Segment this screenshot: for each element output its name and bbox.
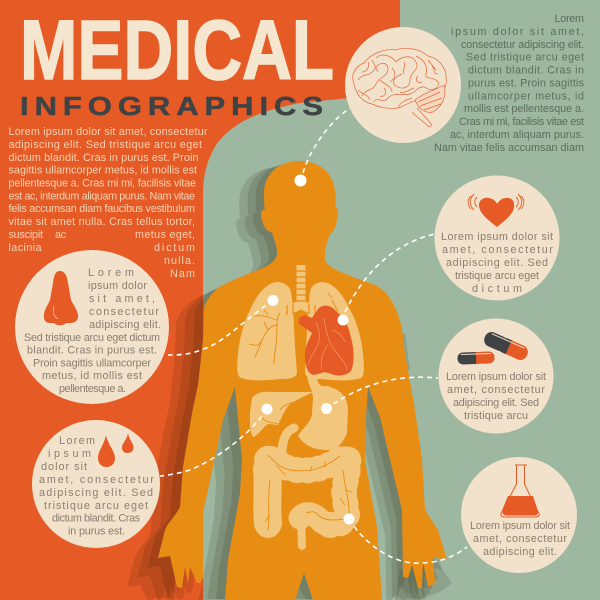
text: blood: in purus est. bbox=[68, 526, 125, 538]
text: nose: ipsum dolor bbox=[88, 280, 147, 292]
trachea and bronchi bbox=[280, 265, 322, 315]
text block: right intro: ullamcorper metus, id bbox=[468, 90, 584, 102]
text: flask bbox=[470, 520, 570, 558]
text block: right intro: dictum blandit. Cras in bbox=[468, 64, 584, 76]
text: nose: metus, id mollis est bbox=[42, 370, 142, 382]
intestines bbox=[266, 428, 348, 546]
stomach bbox=[298, 370, 348, 450]
text: blood: Lorem bbox=[59, 435, 95, 447]
text block: left intro: dictum bbox=[154, 242, 195, 254]
icon: heart bbox=[468, 194, 524, 227]
text: nose: blandit. Cras in purus est. bbox=[27, 344, 157, 356]
panel: nose bbox=[15, 250, 169, 404]
body shadow layers bbox=[127, 163, 452, 600]
text block: right intro: Lorem bbox=[554, 13, 584, 25]
text block: right intro bbox=[434, 13, 585, 154]
human body silhouette bbox=[158, 161, 447, 600]
text block: left intro: nulla. bbox=[164, 255, 195, 267]
panel: blood bbox=[32, 420, 160, 548]
panel: heart bbox=[434, 176, 560, 300]
lung veins bbox=[249, 293, 338, 364]
text block: left intro: felis accumsan diam faucibus vestibulum bbox=[8, 203, 195, 215]
text: blood: tristique arcu eget bbox=[44, 500, 148, 512]
text: nose: Lorem bbox=[88, 267, 134, 279]
icon: brain bbox=[353, 48, 446, 127]
text block: left intro: metus eget, bbox=[135, 229, 195, 241]
text block: left intro: Nam bbox=[170, 268, 195, 280]
text: pills: adipiscing elit. Sed bbox=[453, 397, 539, 409]
text block: right intro: Nam vitae felis accumsan diam bbox=[434, 142, 584, 154]
text: heart bbox=[441, 231, 553, 295]
text: heart: Lorem ipsum dolor sit bbox=[441, 231, 553, 243]
text block: left intro: pellentesque a. Cras mi mi, facilisis vitae bbox=[8, 178, 196, 190]
text: blood: amet, consectetur bbox=[39, 474, 154, 486]
text: nose: Proin sagittis ullamcorper bbox=[33, 358, 151, 370]
text: heart: amet, consectetur bbox=[442, 244, 553, 256]
text block: right intro: Sed tristique arcu eget bbox=[466, 52, 584, 64]
intestine veins bbox=[265, 455, 352, 530]
text: blood: dictum blandit. Cras bbox=[52, 512, 141, 524]
text block: left intro: adipiscing elit. Sed tristique arcu eget bbox=[8, 139, 202, 151]
text: nose: consectetur bbox=[89, 306, 159, 318]
text block: left intro: vitae sit amet nulla. Cras tellus tortor, bbox=[8, 216, 195, 228]
text block: right intro: Cras mi mi, facilisis vitae est bbox=[459, 116, 584, 128]
text block: right intro: mollis est pellentesque a. bbox=[464, 103, 584, 115]
text block: right intro: ipsum dolor sit amet, bbox=[451, 26, 584, 38]
text: heart: adipiscing elit. Sed bbox=[446, 257, 548, 269]
text: flask: amet, consectetur bbox=[473, 533, 567, 545]
text block: left intro: dictum blandit. Cras in purus est. Proin bbox=[8, 152, 198, 164]
text block: right intro: purus est. Proin sagittis bbox=[468, 78, 585, 90]
text block: left intro: sagittis ullamcorper metus, id mollis est bbox=[8, 165, 197, 177]
text: blood: ipsum bbox=[48, 448, 91, 460]
text: flask: Lorem ipsum dolor sit bbox=[470, 520, 570, 532]
icon: pills bbox=[457, 330, 530, 365]
text block: left intro bbox=[8, 126, 208, 280]
icon: blood drops bbox=[98, 433, 134, 467]
text block: left intro: lacinia bbox=[8, 242, 42, 254]
text block: right intro: ac, interdum aliquam purus. bbox=[450, 129, 584, 141]
panel: pills bbox=[438, 318, 554, 434]
text: pills: tristique arcu bbox=[464, 410, 528, 422]
text: nose: sit amet, bbox=[89, 293, 155, 305]
text: nose bbox=[24, 267, 161, 395]
text: heart: tristique arcu eget bbox=[455, 270, 539, 282]
heart organ bbox=[298, 306, 354, 376]
text: nose: Sed tristique arcu eget dictum bbox=[24, 332, 160, 344]
connector lines and dots bbox=[160, 108, 467, 563]
lungs bbox=[237, 282, 364, 380]
text: flask: adipiscing elit. bbox=[483, 546, 557, 558]
text block: left intro: Lorem ipsum dolor sit amet, consectetur bbox=[8, 126, 208, 138]
icon: nose bbox=[43, 271, 80, 328]
liver bbox=[250, 392, 313, 437]
organs bbox=[237, 265, 364, 546]
panel: flask bbox=[461, 457, 577, 573]
text block: left intro: suscipit bbox=[8, 229, 43, 241]
text: pills: Lorem ipsum dolor sit bbox=[446, 371, 546, 383]
text: nose: pellentesque a. bbox=[59, 383, 126, 395]
text block: right intro: consectetur adipiscing elit. bbox=[461, 39, 584, 51]
text: blood: adipiscing elit. Sed bbox=[39, 487, 153, 499]
icon: flask bbox=[501, 465, 539, 517]
text: nose: adipiscing elit. bbox=[89, 319, 161, 331]
text: blood: dolor sit bbox=[41, 461, 87, 473]
text block: left intro: ac bbox=[55, 229, 67, 241]
text: blood bbox=[39, 435, 154, 538]
title: MEDICAL: MEDICAL bbox=[20, 3, 334, 97]
text: heart: dictum bbox=[472, 283, 522, 295]
panel: brain bbox=[345, 27, 461, 143]
text: pills bbox=[446, 371, 546, 422]
text block: left intro: est ac, interdum aliquam purus. Nam vitae bbox=[8, 190, 195, 202]
text: pills: amet, consectetur bbox=[447, 384, 545, 396]
subtitle: INFOGRAPHICS: INFOGRAPHICS bbox=[20, 91, 329, 121]
background: orange panel bbox=[0, 0, 400, 600]
